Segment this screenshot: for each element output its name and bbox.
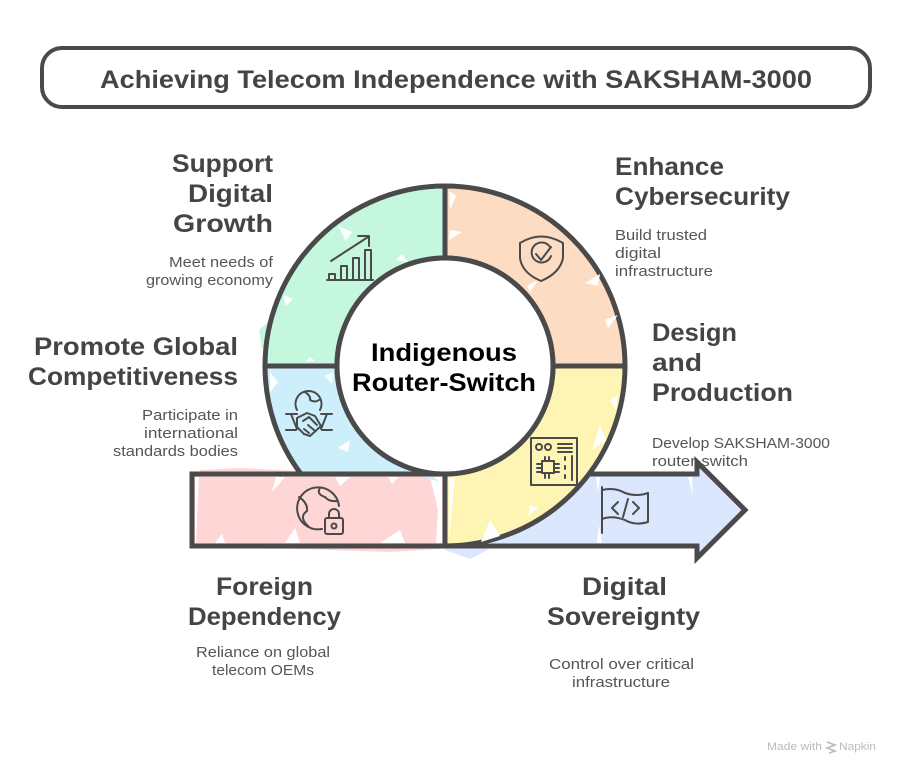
watermark (767, 741, 876, 753)
text block: digital sovereignty (547, 573, 700, 691)
text block: design and production (652, 319, 830, 470)
icon: code flag (602, 487, 648, 533)
text block: digital sovereignty: Sovereignty (547, 603, 700, 631)
arrow: digital sovereignty (445, 462, 745, 559)
text block: enhance cybersecurity: Cybersecurity (615, 183, 790, 211)
title banner (42, 48, 870, 107)
text block: design and production: and (652, 349, 702, 377)
text block: design and production: Develop SAKSHAM-3000 (652, 436, 830, 452)
ring segment: support digital growth (259, 186, 445, 366)
text block: support digital growth: Digital (188, 180, 273, 208)
text block: enhance cybersecurity (615, 153, 790, 280)
text block: foreign dependency (188, 573, 341, 679)
text block: design and production: Production (652, 379, 793, 407)
ring segment: design and production (445, 366, 625, 546)
center circle label (337, 258, 553, 474)
text block: support digital growth (146, 150, 274, 289)
text block: promote global competitiveness: Participate in (142, 408, 238, 424)
text block: enhance cybersecurity: infrastructure (615, 264, 713, 280)
text block: promote global competitiveness (28, 333, 238, 460)
text block: design and production: Design (652, 319, 737, 347)
text block: foreign dependency: telecom OEMs (212, 663, 314, 679)
icon: growth chart (327, 236, 373, 280)
text block: digital sovereignty: Control over critical (549, 657, 694, 673)
text block: support digital growth: Growth (173, 210, 273, 238)
center circle label: Router-Switch (352, 369, 536, 397)
text block: enhance cybersecurity: Enhance (615, 153, 724, 181)
text block: foreign dependency: Dependency (188, 603, 341, 631)
bar: foreign dependency (192, 463, 445, 552)
text block: enhance cybersecurity: Build trusted (615, 228, 707, 244)
icon: globe with lock (297, 487, 343, 534)
text block: support digital growth: Support (172, 150, 274, 178)
ring segment: enhance cybersecurity (445, 186, 625, 366)
text block: support digital growth: growing economy (146, 273, 274, 289)
text block: foreign dependency: Foreign (216, 573, 313, 601)
text block: support digital growth: Meet needs of (169, 255, 274, 271)
center circle label: Indigenous (371, 339, 517, 367)
icon: handshake globe (286, 391, 332, 436)
title banner: Achieving Telecom Independence with SAKSHAM-3000 (100, 66, 812, 94)
text block: foreign dependency: Reliance on global (196, 645, 330, 661)
text block: enhance cybersecurity: digital (615, 246, 661, 262)
watermark: Napkin (839, 741, 876, 753)
icon: shield check (520, 236, 563, 281)
watermark: Made with (767, 741, 822, 753)
text block: promote global competitiveness: Competitiveness (28, 363, 238, 391)
text block: promote global competitiveness: standards bodies (113, 444, 238, 460)
text block: digital sovereignty: infrastructure (572, 675, 670, 691)
ring segment: promote global competitiveness (265, 366, 445, 482)
text block: promote global competitiveness: international (144, 426, 238, 442)
text block: design and production: router-switch (652, 454, 748, 470)
ring (259, 186, 625, 546)
text block: digital sovereignty: Digital (582, 573, 667, 601)
text block: promote global competitiveness: Promote Global (34, 333, 238, 361)
icon: circuit board (531, 438, 577, 485)
